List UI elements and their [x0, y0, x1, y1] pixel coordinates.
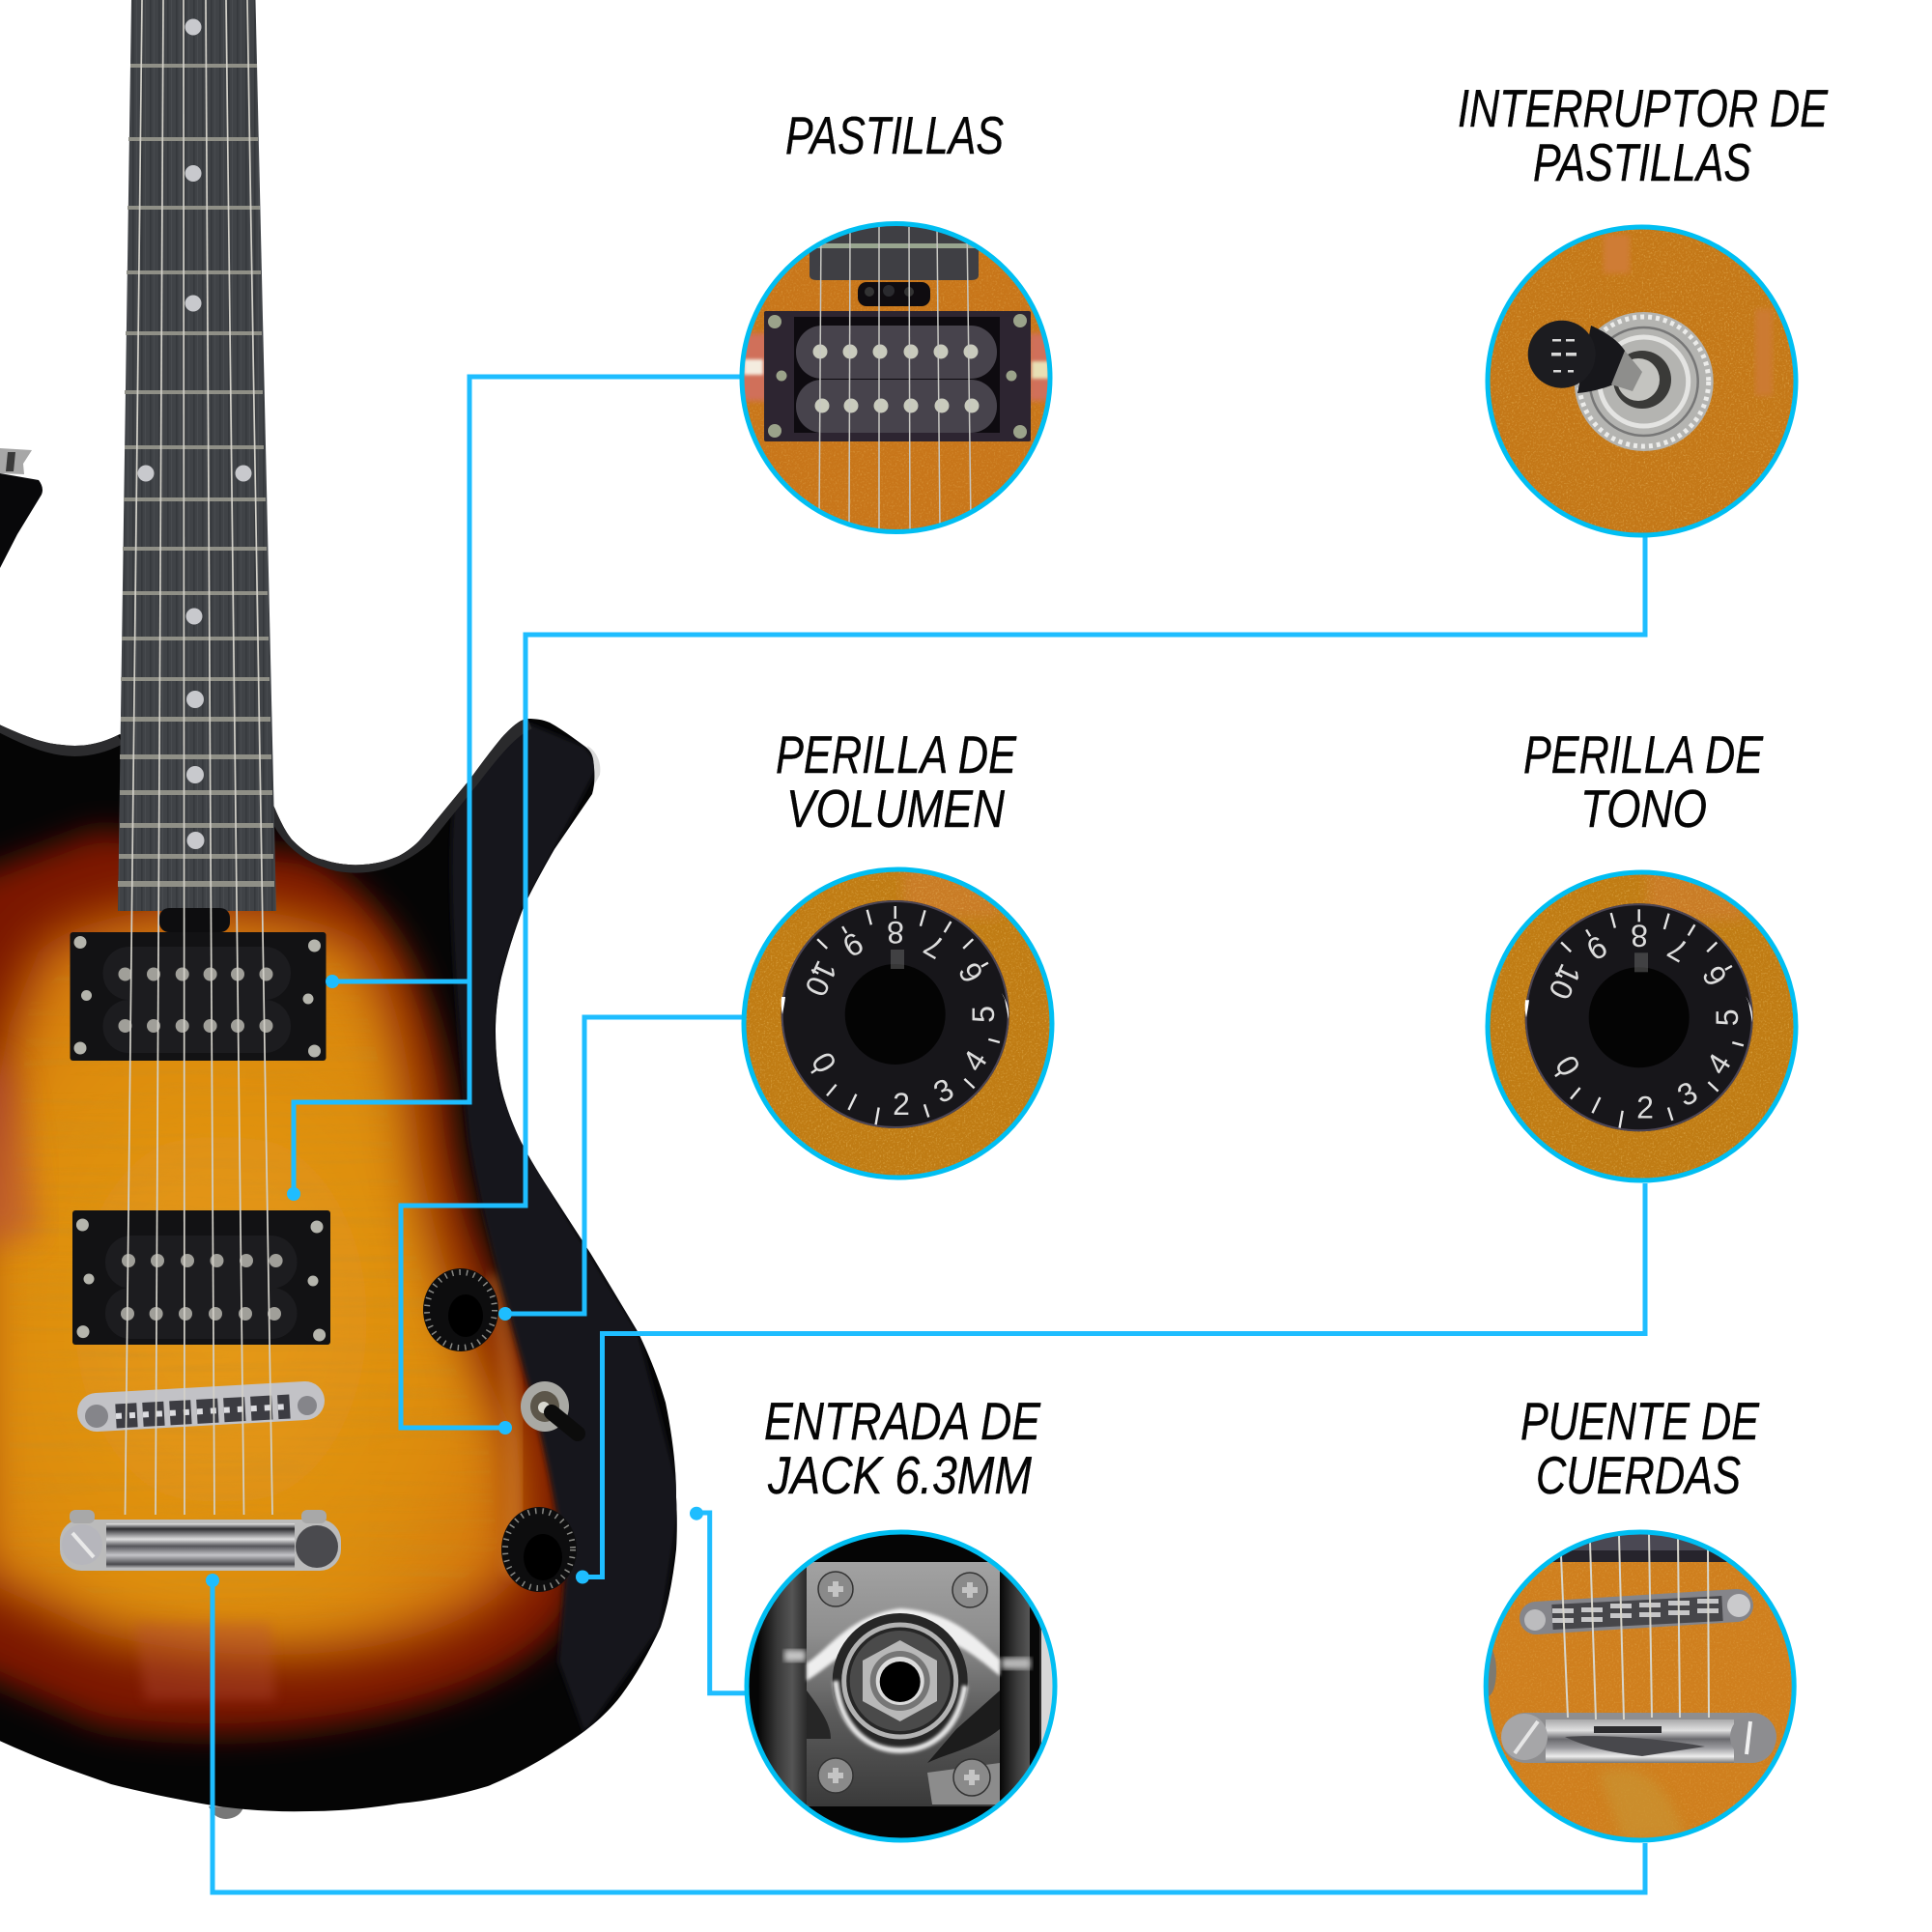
dial numbers — [1550, 924, 1739, 1119]
dial numbers: 9 — [837, 925, 869, 964]
neck pickup — [70, 932, 327, 1061]
label: perilla de tono — [1523, 724, 1764, 838]
horn tip chip — [587, 746, 600, 787]
pickup selector switch — [521, 1381, 578, 1434]
jack plate — [807, 1562, 1000, 1806]
label: interruptor de pastillas — [1458, 78, 1829, 192]
connector: jack — [690, 1507, 746, 1693]
label: perilla de volumen: PERILLA DE — [776, 724, 1017, 784]
label: entrada de jack: JACK 6.3MM — [767, 1445, 1032, 1505]
tune-o-matic bridge — [85, 1396, 317, 1428]
dial numbers: 7 — [1662, 930, 1694, 969]
detail circle: puente de cuerdas — [1479, 1531, 1802, 1840]
fret markers — [137, 19, 251, 849]
detail circle: pastillas — [734, 217, 1063, 541]
dial numbers: 5 — [1710, 1009, 1745, 1026]
dial numbers: 3 — [1671, 1074, 1703, 1113]
fretboard — [118, 0, 276, 911]
dial numbers: 6 — [952, 957, 990, 988]
label: perilla de volumen — [776, 724, 1017, 838]
label: puente de cuerdas — [1520, 1391, 1760, 1505]
dial numbers: 2 — [893, 1087, 910, 1122]
toggle lever — [1577, 326, 1631, 393]
connector: pickups — [287, 377, 744, 1201]
connector: pickup selector — [401, 537, 1645, 1435]
bridge pickup — [72, 1210, 330, 1345]
bridge strings — [1561, 1534, 1709, 1719]
plate screws — [818, 1572, 990, 1796]
dial numbers: 9 — [1580, 928, 1613, 967]
dial numbers: 4 — [955, 1044, 994, 1077]
connector: tone — [576, 1183, 1645, 1584]
frets — [118, 64, 274, 887]
headstock fragment — [0, 448, 43, 568]
detail circle: entrada de jack — [744, 1531, 1063, 1840]
dial numbers: 8 — [1631, 918, 1648, 952]
label: puente de cuerdas: PUENTE DE — [1520, 1391, 1760, 1451]
detail circle: perilla de volumen — [739, 865, 1058, 1183]
toggle washer — [1575, 312, 1714, 451]
tone knob — [501, 1507, 577, 1592]
strap button — [209, 1806, 243, 1819]
dial ticks — [1554, 909, 1744, 1128]
label: entrada de jack: ENTRADA DE — [764, 1391, 1041, 1451]
dial numbers: 6 — [1695, 960, 1734, 992]
label: puente de cuerdas: CUERDAS — [1536, 1445, 1741, 1505]
dial numbers: 5 — [966, 1006, 1001, 1023]
dial numbers: 10 — [1542, 959, 1588, 1005]
label: perilla de tono: TONO — [1580, 779, 1707, 838]
stopbar tailpiece — [60, 1510, 341, 1571]
dial numbers: 0 — [1548, 1050, 1587, 1082]
neck joint — [159, 908, 230, 932]
stopbar detail — [1501, 1713, 1776, 1763]
dial numbers: 7 — [918, 927, 951, 966]
label: interruptor de pastillas: INTERRUPTOR DE — [1458, 78, 1829, 138]
dial numbers: 8 — [887, 915, 904, 950]
strings — [126, 0, 272, 1515]
connector: bridge — [206, 1574, 1645, 1892]
label: perilla de volumen: VOLUMEN — [786, 779, 1005, 838]
detail circle: perilla de tono — [1483, 867, 1802, 1186]
dial numbers: 2 — [1636, 1090, 1654, 1124]
dial ticks — [810, 906, 1000, 1124]
dial numbers: 10 — [798, 955, 844, 1002]
label: interruptor de pastillas: PASTILLAS — [1533, 132, 1751, 192]
guitar body — [0, 705, 696, 1835]
volume knob — [423, 1268, 498, 1351]
dial numbers — [807, 922, 995, 1115]
knob dial — [1525, 903, 1753, 1131]
label: perilla de tono: PERILLA DE — [1523, 724, 1764, 784]
knob dial — [781, 900, 1009, 1128]
jack socket — [833, 1613, 968, 1750]
dial numbers: 3 — [927, 1071, 959, 1110]
label: entrada de jack — [764, 1391, 1041, 1505]
tune-o-matic detail — [1524, 1594, 1750, 1631]
guitar — [0, 0, 696, 1835]
dial numbers: 4 — [1699, 1047, 1738, 1080]
detail circle: interruptor — [1478, 222, 1806, 541]
dial numbers: 0 — [805, 1046, 843, 1079]
connector: volume — [498, 1017, 744, 1321]
label: pastillas: PASTILLAS — [785, 105, 1004, 165]
